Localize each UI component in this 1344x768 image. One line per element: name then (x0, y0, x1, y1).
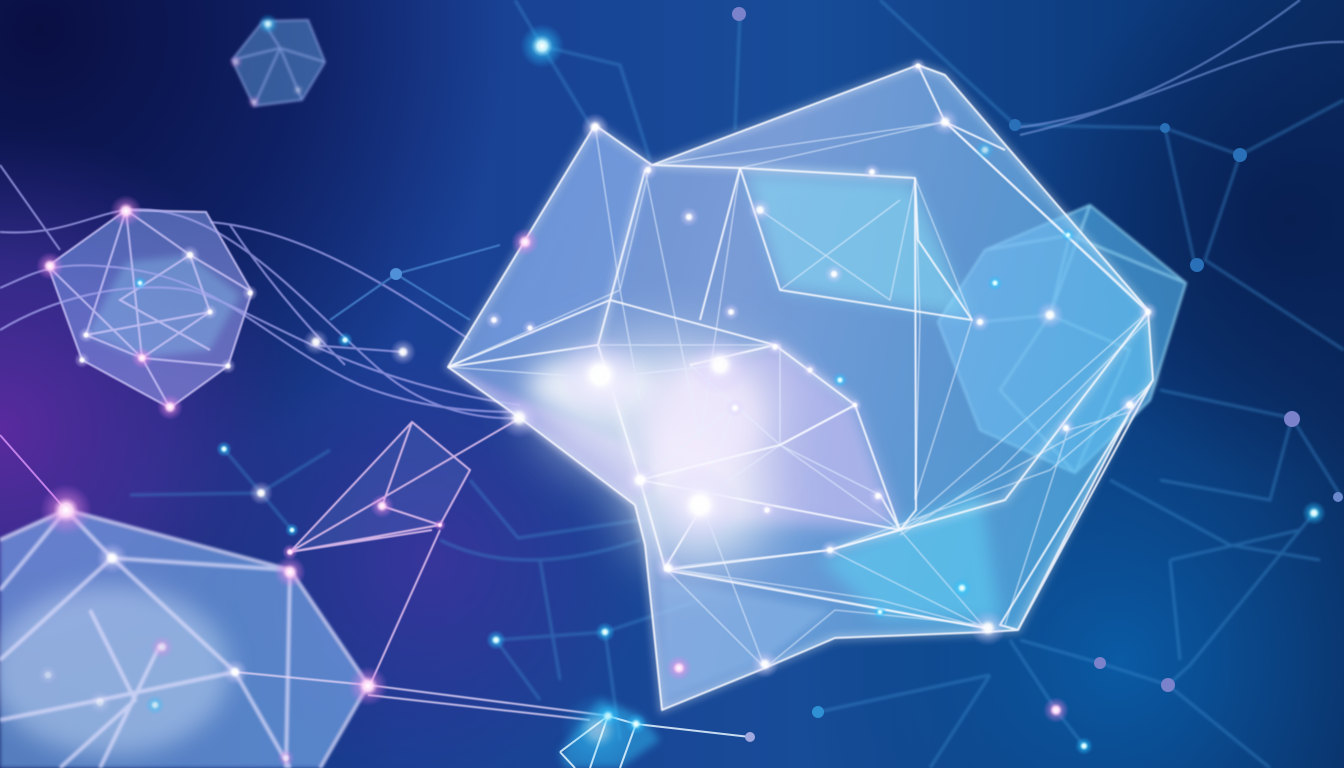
glow nodes: white (96, 58, 1158, 678)
small polyhedron bottom (560, 700, 750, 768)
main polyhedron body (448, 65, 1153, 710)
main polyhedron thin facets (448, 122, 1150, 668)
flowing curves left (0, 165, 520, 418)
polyhedron back right (938, 205, 1186, 473)
polyhedron upper left (48, 210, 252, 408)
central link lines lower left (290, 418, 520, 685)
edge halo (448, 65, 1153, 710)
polyhedron lower left (0, 435, 610, 768)
small polyhedron top left (229, 14, 325, 109)
background curves upper right (1015, 0, 1344, 135)
main polyhedron bright edges (448, 65, 1153, 710)
